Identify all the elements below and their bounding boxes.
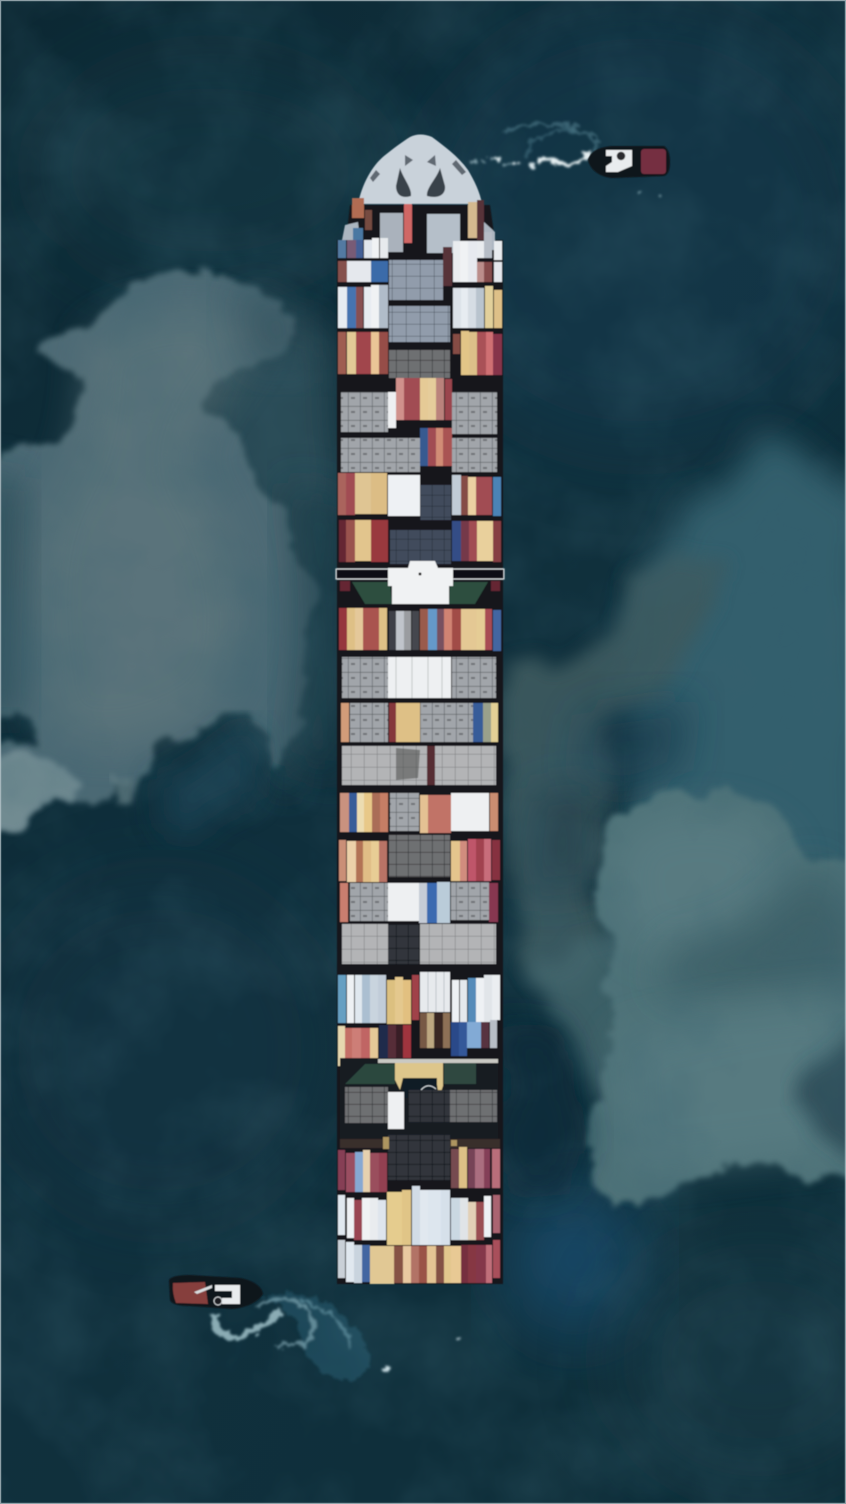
aft superstructure xyxy=(340,1058,498,1138)
container rows forward xyxy=(338,232,502,378)
bow deck xyxy=(342,134,495,250)
bridge crossing xyxy=(336,561,504,605)
midship row two xyxy=(338,473,501,564)
right sediment cloud xyxy=(498,425,846,1212)
left sediment cloud xyxy=(0,271,345,840)
stern containers xyxy=(338,1135,500,1284)
hull xyxy=(337,205,503,1284)
midship row one xyxy=(341,378,497,472)
midship row four xyxy=(339,746,500,964)
tugboat top right xyxy=(588,146,670,178)
container ship xyxy=(336,134,504,1284)
tugboat bottom left xyxy=(169,1275,263,1309)
midship row three xyxy=(339,608,501,742)
cloud edge shading xyxy=(285,480,345,780)
bottom wake xyxy=(214,1292,458,1382)
forward containers xyxy=(352,198,484,286)
aft containers xyxy=(338,972,500,1068)
top wake xyxy=(470,123,662,198)
